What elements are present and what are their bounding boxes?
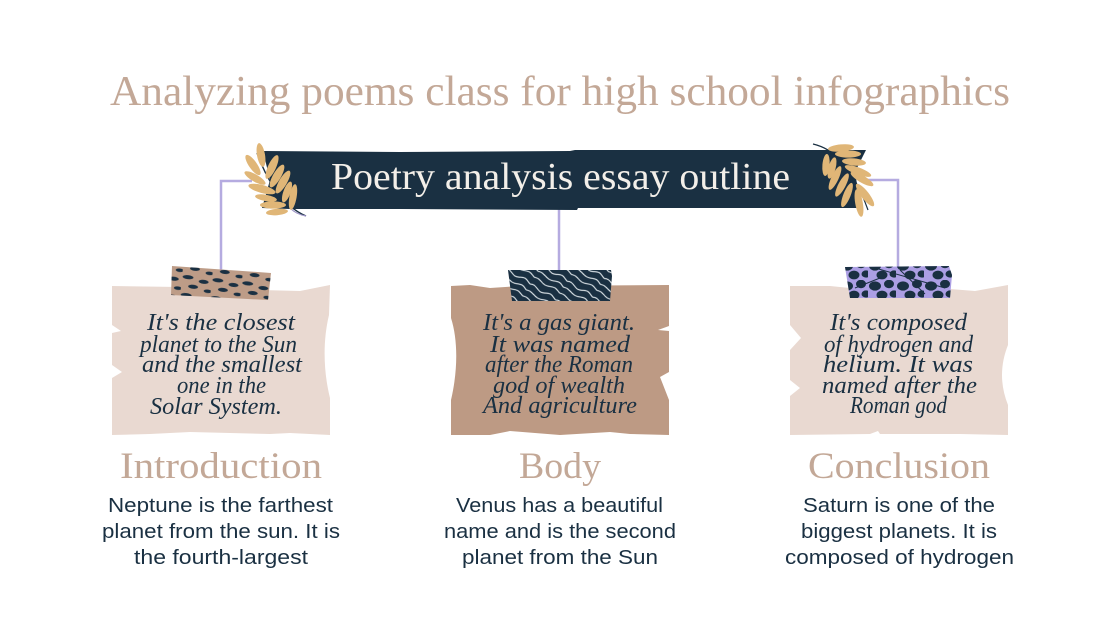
paper note [790,285,1008,435]
paper note [451,285,669,435]
note text: It's the closest [146,310,296,336]
description: Saturn is one of the [803,495,995,517]
note text [481,310,637,419]
note text: Solar System. [150,394,282,420]
icon: left leaf branch [243,142,306,216]
note text: It was named [489,332,631,358]
note text: It's composed [829,310,968,336]
description: biggest planets. It is [801,521,997,543]
description: the fourth-largest [134,547,308,569]
note text: And agriculture [481,393,637,419]
description: composed of hydrogen [785,547,1014,569]
panel: introduction [102,266,340,569]
note text: It's a gas giant. [482,310,635,336]
title: Analyzing poems class for high school infographics [110,69,1010,115]
note text: god of wealth [493,373,625,399]
description [444,495,676,569]
banner ribbon [262,150,866,210]
note text: one in the [177,373,266,399]
heading: Conclusion [808,446,990,487]
connector lines [221,180,898,272]
note text: helium. It was [823,352,973,378]
heading: Body [519,446,602,487]
description: Venus has a beautiful [456,495,663,517]
note text [138,310,303,420]
note text: Roman god [849,393,948,419]
description [785,495,1014,569]
description: planet from the Sun [462,547,658,569]
banner [262,150,866,210]
description [102,495,340,569]
panel: body [444,270,676,569]
washi tape [845,266,952,298]
heading: Introduction [120,446,322,487]
washi tape [171,266,271,300]
description: name and is the second [444,521,676,543]
banner text: Poetry analysis essay outline [331,156,790,198]
icon: right leaf branch [813,143,877,217]
description: planet from the sun. It is [102,521,340,543]
description: Neptune is the farthest [108,495,333,517]
note text: planet to the Sun [138,332,297,358]
note text: after the Roman [485,352,633,378]
note text: named after the [822,373,977,399]
panel: conclusion [785,266,1014,569]
note text: of hydrogen and [824,332,974,358]
paper note [112,285,330,435]
note text [822,310,977,419]
note text: and the smallest [142,352,303,378]
washi tape [508,270,612,301]
